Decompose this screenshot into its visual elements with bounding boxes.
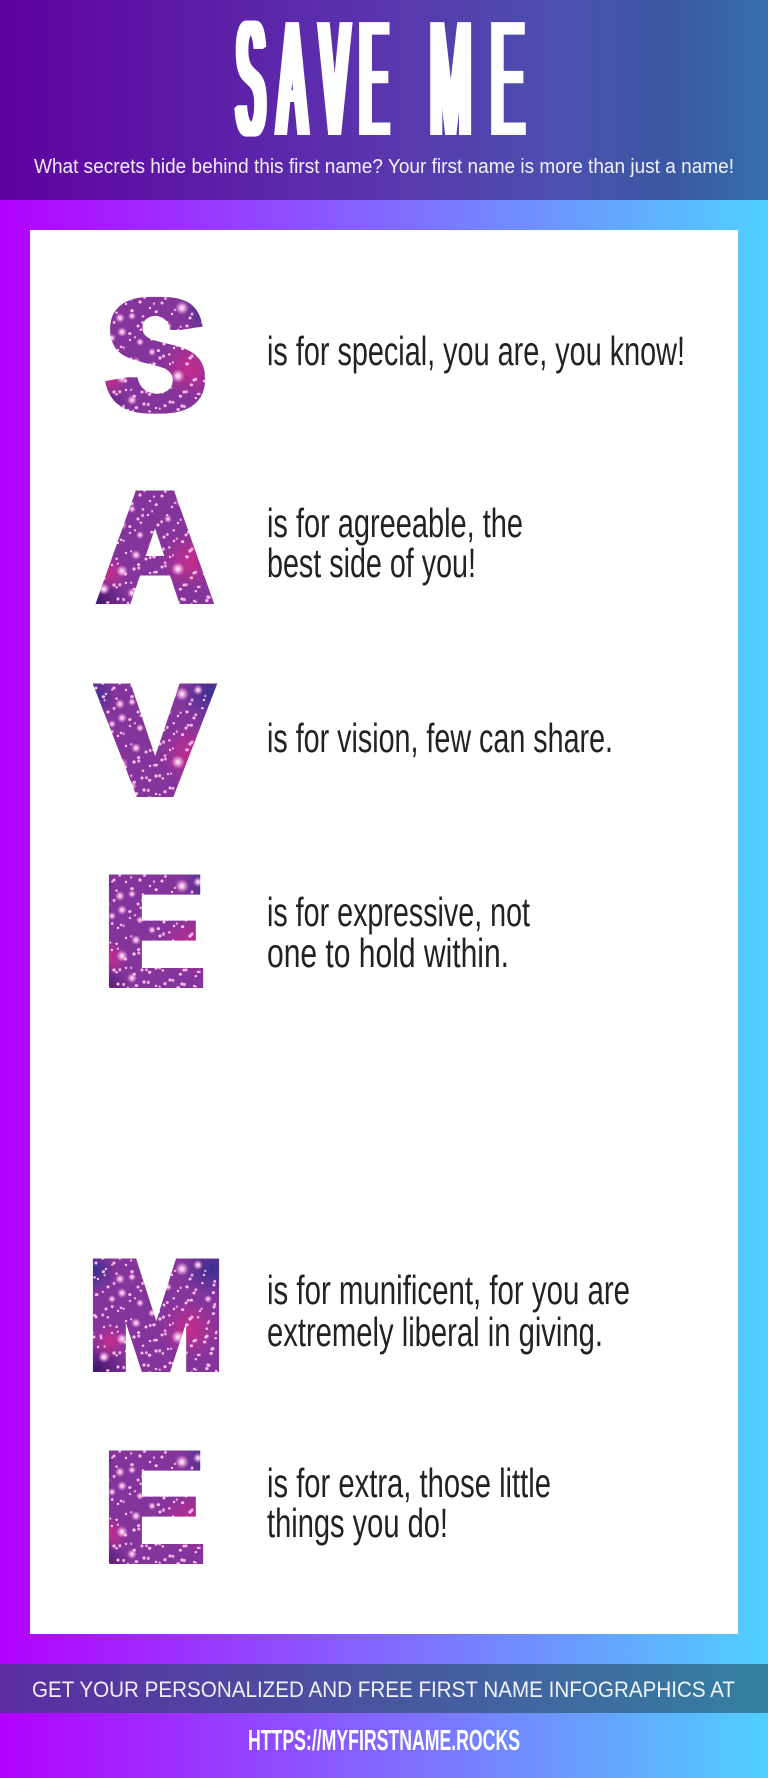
galaxy letter S <box>105 296 206 414</box>
galaxy letter V <box>92 684 218 797</box>
row: V <box>92 684 610 797</box>
white content panel <box>30 230 738 1634</box>
text: E second lines: things you do! <box>267 1500 448 1546</box>
text: E second lines <box>267 1460 551 1546</box>
galaxy letter E <box>108 1450 204 1564</box>
text: E lines <box>267 889 530 976</box>
text: V line: is for vision, few can share. <box>267 715 613 761</box>
text: M lines <box>267 1267 630 1355</box>
text: M lines: extremely liberal in giving. <box>267 1309 603 1355</box>
text: E lines: one to hold within. <box>267 930 509 976</box>
footer text: GET YOUR PERSONALIZED AND FREE FIRST NAME INFOGRAPHICS AT <box>32 1677 735 1702</box>
footer call-to-action band <box>0 1664 768 1713</box>
text: A lines: best side of you! <box>267 540 476 586</box>
text: E lines: is for expressive, not <box>267 889 530 935</box>
title <box>237 0 524 171</box>
row: S <box>105 296 682 414</box>
text: E second lines: is for extra, those little <box>267 1460 551 1506</box>
text: M lines: is for munificent, for you are <box>267 1267 630 1313</box>
text: A lines <box>267 500 523 586</box>
footer url: HTTPS://MYFIRSTNAME.ROCKS <box>248 1725 520 1757</box>
row: A <box>96 490 522 604</box>
header band <box>0 0 768 200</box>
galaxy letter M <box>92 1258 220 1372</box>
galaxy letter A <box>96 490 214 604</box>
row: E second <box>108 1450 550 1564</box>
text: A lines: is for agreeable, the <box>267 500 523 546</box>
row: M <box>92 1258 629 1372</box>
subtitle: What secrets hide behind this first name? Your first name is more than just a name! <box>34 156 734 178</box>
galaxy letter E <box>108 874 204 988</box>
row: E <box>108 874 530 988</box>
